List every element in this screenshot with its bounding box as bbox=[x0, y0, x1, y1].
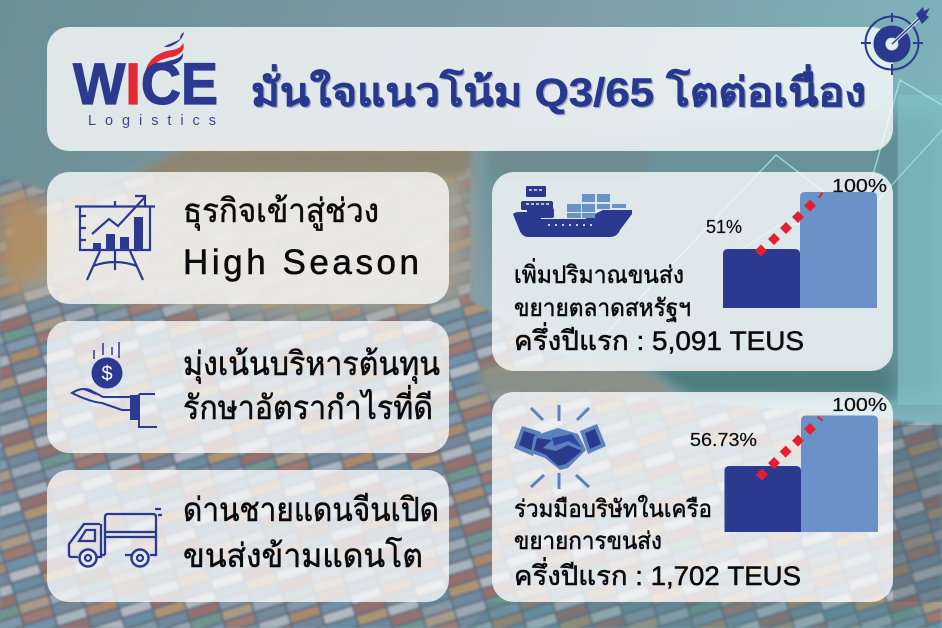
label: 100%: 100% bbox=[832, 176, 887, 196]
logo: WICE Logistics bbox=[73, 32, 218, 129]
icon: handshake bbox=[514, 405, 606, 489]
logo flag swoosh bbox=[145, 32, 184, 78]
bar chart: shipping bbox=[706, 176, 887, 308]
red dotted trend line bbox=[755, 192, 824, 256]
panel: cost management bbox=[47, 321, 449, 453]
panel: border trade bbox=[47, 470, 449, 602]
panel: shipping volume bbox=[492, 172, 893, 371]
logo wordmark: WICE bbox=[73, 52, 218, 117]
text: expand US: ขยายตลาดสหรัฐฯ bbox=[514, 295, 691, 322]
text: High Season: High Season bbox=[183, 243, 419, 282]
label: 100% second: 100% bbox=[832, 395, 887, 415]
text: expand shipping: ขยายการขนส่ง bbox=[514, 528, 662, 555]
text: first half 1,702 TEUS: ครึ่งปีแรก : 1,702 TEUS bbox=[514, 557, 801, 591]
red dotted trend line second bbox=[756, 416, 824, 480]
icon: truck bbox=[69, 509, 162, 566]
icon: presentation chart bbox=[75, 196, 155, 280]
label: 51%: 51% bbox=[706, 217, 742, 237]
bar chart: partnership bbox=[690, 395, 887, 532]
icon: hand with coin bbox=[72, 342, 157, 427]
text: first half 5,091 TEUS: ครึ่งปีแรก : 5,091 TEUS bbox=[514, 322, 804, 356]
label: 56.73%: 56.73% bbox=[690, 430, 757, 450]
icon: hand with coin: $ bbox=[101, 363, 113, 385]
logo subtitle: Logistics bbox=[88, 113, 216, 129]
text: cross border growth: ขนส่งข้ามแดนโต bbox=[183, 537, 423, 574]
icon: cargo ship bbox=[513, 186, 632, 237]
title: มั่นใจแนวโน้ม Q3/65 โตต่อเนื่อง bbox=[252, 66, 868, 116]
icon: target with arrow bbox=[861, 7, 930, 75]
title: มั่นใจแนวโน้ม Q3/65 โตต่อเนื่อง bbox=[251, 64, 866, 115]
text: China border: ด่านชายแดนจีนเปิด bbox=[183, 491, 439, 528]
text: increase volume: เพิ่มปริมาณขนส่ง bbox=[514, 258, 684, 289]
panel: header bbox=[47, 7, 930, 151]
text: maintain margin: รักษาอัตรากำไรที่ดี bbox=[183, 385, 433, 426]
text: partner companies: ร่วมมือบริษัทในเครือ bbox=[514, 495, 712, 523]
text: business entering: ธุรกิจเข้าสู่ช่วง bbox=[183, 192, 379, 231]
text: cost management: มุ่งเน้นบริหารต้นทุน bbox=[183, 345, 440, 384]
panel: high season bbox=[47, 172, 449, 304]
panel: partnership bbox=[492, 392, 893, 602]
